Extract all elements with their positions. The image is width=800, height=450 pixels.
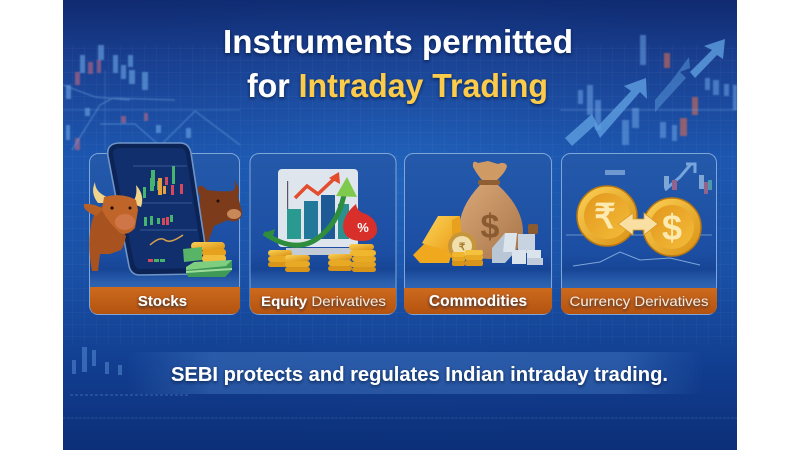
label: Commodities	[404, 288, 552, 314]
icon: money bag	[459, 161, 523, 259]
icon: gold coin emblem and stacks: ₹	[459, 242, 466, 253]
icon: coin stacks	[268, 244, 376, 272]
background rising arrows	[565, 39, 725, 146]
label: Stocks: Stocks	[138, 293, 187, 310]
title	[223, 24, 573, 105]
mini background chart	[566, 164, 712, 266]
title: for Intraday Trading	[247, 68, 548, 105]
icon: rupee coin	[577, 186, 637, 246]
label: Currency Derivatives	[561, 288, 717, 314]
icon: gold bars	[413, 216, 463, 263]
icon: silver blocks	[492, 224, 543, 265]
footer band	[125, 352, 705, 394]
bottom background strokes	[63, 347, 737, 418]
icon: green rising arrow	[264, 177, 357, 245]
label: Stocks	[90, 287, 240, 314]
icon: dollar coin: $	[662, 207, 682, 248]
icon: money bag: $	[481, 208, 500, 246]
icon: coins and cash	[183, 242, 232, 277]
title: Instruments permitted	[223, 24, 573, 61]
icon: left bull	[84, 182, 142, 271]
label: Commodities: Commodities	[429, 293, 527, 310]
card: Stocks	[84, 143, 242, 314]
icon: phone with charts	[108, 143, 208, 275]
card: Equity Derivatives	[250, 154, 396, 314]
background chart: left candlesticks and lines	[63, 45, 240, 150]
card: Commodities	[404, 154, 552, 314]
footer message: SEBI protects and regulates Indian intraday trading.	[171, 364, 668, 386]
icon: exchange arrow	[618, 213, 658, 235]
background chart: right candlesticks	[560, 35, 737, 145]
icon: dollar coin	[643, 198, 701, 256]
icon: percent badge: %	[357, 220, 369, 235]
label: Equity Derivatives: Equity Derivatives	[261, 293, 386, 309]
icon: right bull	[198, 180, 242, 242]
icon: percent badge	[343, 204, 377, 241]
label: Equity Derivatives	[250, 288, 396, 314]
icon: bar chart board	[278, 169, 362, 255]
icon: rupee coin: ₹	[594, 198, 616, 236]
icon: gold coin emblem and stacks	[448, 232, 483, 266]
label: Currency Derivatives: Currency Derivatives	[570, 293, 708, 309]
card: Currency Derivatives	[561, 154, 717, 314]
